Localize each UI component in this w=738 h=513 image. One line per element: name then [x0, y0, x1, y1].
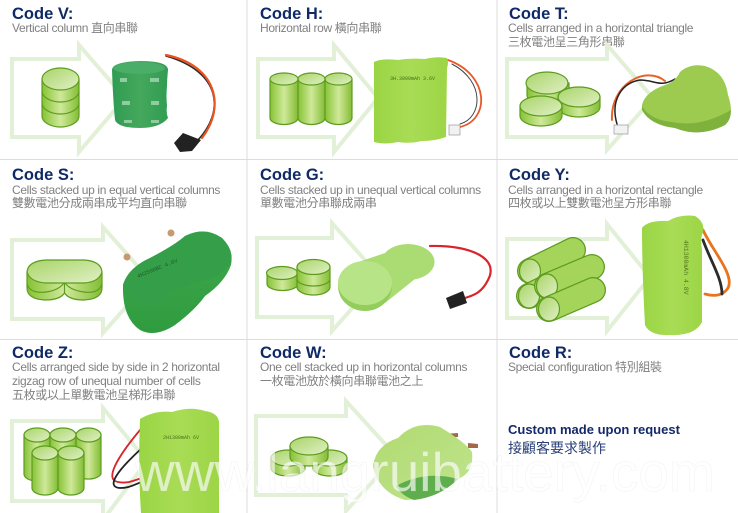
heading: Code Z: Code Z:: [12, 344, 73, 362]
description: Code S: 雙數電池分成兩串成平均直向串聯: [12, 195, 187, 210]
description: Code H: Horizontal row 橫向串聯: [260, 20, 382, 35]
arrow: Code V: [12, 45, 125, 152]
heading: Code Y: Code Y:: [509, 166, 570, 184]
description: Code T: [508, 21, 694, 49]
description: Code V: Vertical column 直向串聯: [12, 20, 138, 35]
panel: Code R: [508, 344, 681, 456]
description: Code G: 單數電池分串聯成兩串: [260, 196, 377, 210]
icon: one cell on a row: [271, 437, 347, 476]
description: Code R: Special configuration 特別組裝: [508, 359, 662, 374]
panel: Code V: [12, 5, 215, 152]
icon: vertical cell stack: [42, 68, 79, 127]
battery: Code H: [374, 57, 481, 144]
description: Code Y: 四枚或以上雙數電池呈方形串聯: [508, 195, 671, 210]
arrow: Code S: [12, 227, 150, 333]
icon: four horizontal cells: [518, 250, 593, 321]
battery: Code W: [373, 425, 478, 500]
description: Code T: Cells arranged in a horizontal triangle: [508, 21, 694, 35]
description: Code Z: zigzag row of unequal number of cells: [12, 374, 201, 388]
description: Code Z: [12, 360, 220, 402]
battery: Code H: 3H.3000mAh 3.6V: [390, 76, 435, 82]
description: Code G: Cells stacked up in unequal vertical columns: [260, 183, 481, 197]
panel: Code W: [256, 344, 478, 511]
battery: Code Z: [112, 409, 219, 513]
battery: Code Y: [642, 216, 729, 335]
panel: Code T: [507, 5, 731, 150]
callout: custom made: [508, 422, 681, 456]
heading: Code R: Code R:: [509, 344, 572, 362]
heading: Code T: Code T:: [509, 5, 569, 23]
icon: triangle of cells: [520, 72, 600, 126]
callout: custom made: 接顧客要求製作: [508, 440, 606, 456]
heading: Code S: Code S:: [12, 166, 74, 184]
heading: Code H: Code H:: [260, 5, 323, 23]
description: Code Y: Cells arranged in a horizontal rectangle: [508, 183, 703, 197]
battery: Code Y: 4H1300mAh 4.8V: [682, 240, 689, 295]
description: Code S: Cells stacked up in equal vertical columns: [12, 183, 220, 197]
heading: Code G: Code G:: [260, 166, 324, 184]
panel: Code Y: [507, 166, 729, 335]
icon: horizontal cell row: [270, 73, 352, 124]
description: Code W: One cell stacked up in horizontal columns: [260, 360, 467, 374]
battery: Code T: [612, 65, 731, 134]
description: Code Z: Cells arranged side by side in 2 horizontal: [12, 360, 220, 374]
description: Code Y: [508, 183, 703, 210]
description: Code T: 三枚電池呈三角形串聯: [508, 34, 625, 49]
watermark: www.langruibattery.com: [134, 441, 715, 503]
description: Code Z: 五枚或以上單數電池呈梯形串聯: [12, 387, 175, 402]
heading: Code W: Code W:: [260, 344, 327, 362]
battery: Code S: [123, 230, 232, 333]
description: Code W: 一枚電池放於橫向串聯電池之上: [260, 373, 423, 388]
panel: Code Z: [12, 344, 220, 513]
panel: Code S: [12, 166, 232, 333]
heading: Code V: Code V:: [12, 5, 73, 23]
arrow: Code W: [256, 401, 396, 511]
battery: Code S: 4H2500BC 4.8V: [136, 257, 179, 280]
battery: Code Z: 2H1300mAh 6V: [163, 435, 199, 441]
arrow: Code Y: [507, 224, 650, 331]
panel: Code G: [257, 166, 491, 331]
arrow: Code T: [507, 45, 653, 150]
description: Code S: [12, 183, 220, 210]
battery: Code V: [112, 55, 215, 152]
callout: custom made: Custom made upon request: [508, 422, 681, 437]
icon: unequal stacked columns: [266, 260, 330, 295]
description: Code W: [260, 360, 467, 388]
icon: equal stacked columns: [27, 260, 102, 300]
icon: zigzag cells: [24, 428, 101, 495]
arrow: Code G: [257, 223, 380, 331]
arrow: Code H: [258, 45, 378, 152]
arrow: Code Z: [12, 408, 147, 513]
description: Code G: [260, 183, 481, 210]
battery: Code G: [338, 244, 491, 311]
panel: Code H: [258, 5, 481, 152]
